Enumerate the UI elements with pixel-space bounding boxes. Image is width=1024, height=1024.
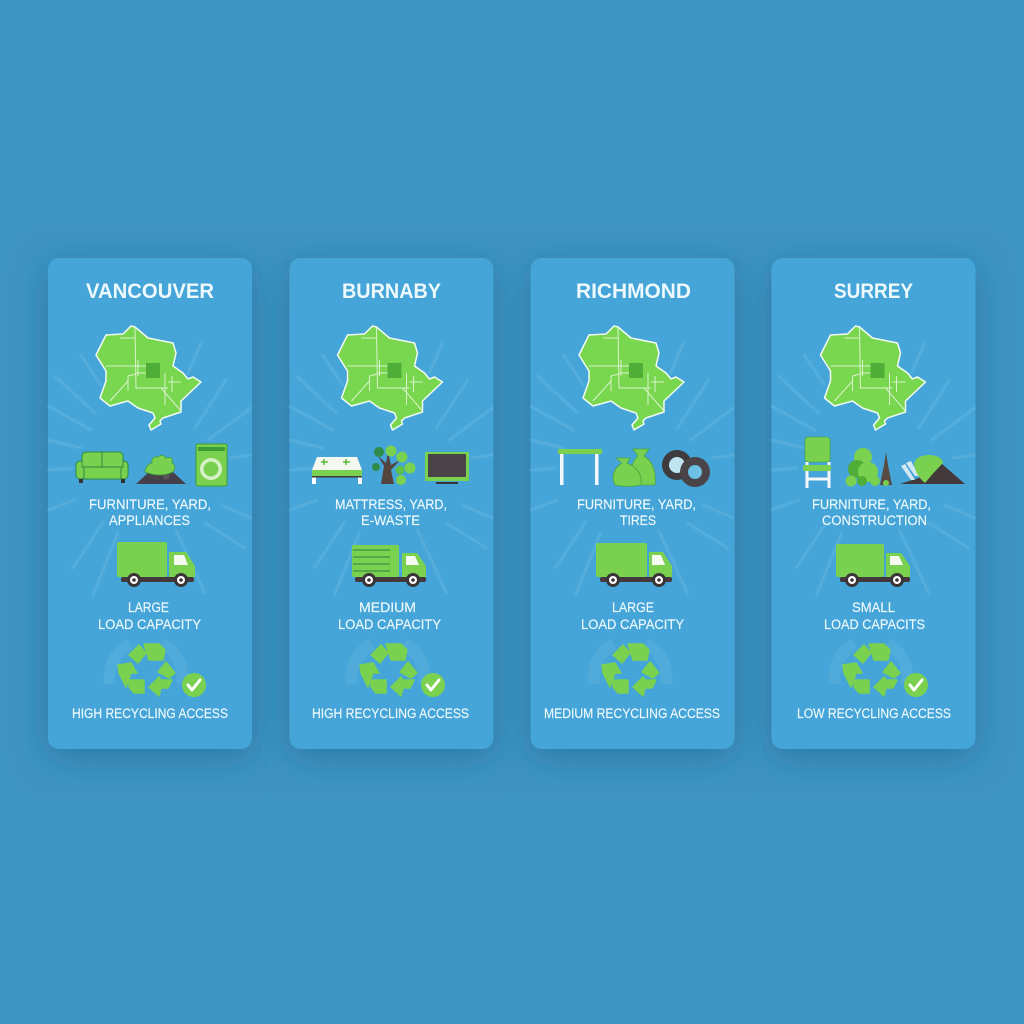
- icon: city map: [820, 326, 926, 430]
- panel: Surrey: [772, 258, 976, 749]
- card background: [48, 258, 252, 749]
- radiating rays: [772, 343, 974, 595]
- card background: [530, 258, 734, 749]
- heading: RICHMOND: [576, 280, 691, 303]
- icon: mattress: [312, 457, 362, 484]
- text: waste types: FURNITURE, YARD,: [89, 497, 211, 512]
- text: waste types: FURNITURE, YARD,: [577, 497, 696, 512]
- text: waste types: MATTRESS, YARD,: [335, 497, 447, 512]
- text: load capacity: MEDIUM: [359, 600, 416, 615]
- text: waste types: [335, 497, 447, 528]
- icon: washing machine: [196, 444, 227, 486]
- text: recycling access: HIGH RECYCLING ACCESS: [72, 706, 228, 721]
- panel: Burnaby: [290, 258, 494, 749]
- text: waste types: TIRES: [620, 513, 656, 528]
- icon: construction debris: [900, 455, 965, 484]
- text: waste types: CONSTRUCTION: [822, 513, 927, 528]
- icon: city map: [579, 326, 684, 430]
- text: recycling access: MEDIUM RECYCLING ACCESS: [544, 706, 720, 721]
- icon: recycling symbol: [834, 644, 908, 696]
- icon: truck: [836, 544, 910, 587]
- icon: truck: [596, 543, 672, 587]
- icon: city map: [338, 326, 442, 430]
- icon: chair: [803, 437, 831, 488]
- icon: tree: [372, 446, 416, 485]
- icon: television: [425, 452, 469, 484]
- radiating rays: [290, 343, 492, 595]
- panel: Vancouver: [48, 258, 252, 749]
- icon: yard waste mound: [136, 455, 186, 484]
- text: waste types: [89, 497, 211, 528]
- text: recycling access: LOW RECYCLING ACCESS: [797, 706, 951, 721]
- heading: VANCOUVER: [86, 280, 214, 303]
- text: load capacity: [338, 600, 441, 632]
- card background: [772, 258, 976, 749]
- icon: truck: [117, 542, 195, 587]
- text: recycling access: HIGH RECYCLING ACCESS: [312, 706, 469, 721]
- text: waste types: [812, 497, 931, 528]
- icon: garbage bags: [613, 449, 655, 486]
- text: load capacity: [581, 600, 684, 632]
- icon: city map: [96, 326, 201, 430]
- icon: table: [558, 449, 602, 485]
- icon: truck: [352, 545, 426, 587]
- text: waste types: E-WASTE: [361, 513, 420, 528]
- heading: BURNABY: [342, 280, 441, 303]
- text: load capacity: [824, 600, 925, 632]
- radiating rays: [48, 343, 251, 595]
- text: load capacity: LARGE: [612, 600, 654, 615]
- radiating rays: [530, 343, 734, 595]
- text: waste types: [577, 497, 696, 528]
- text: load capacity: LOAD CAPACITY: [98, 617, 201, 632]
- icon: check mark: [182, 673, 206, 697]
- heading: SURREY: [834, 280, 913, 303]
- text: waste types: FURNITURE, YARD,: [812, 497, 931, 512]
- icon: check mark: [421, 673, 445, 697]
- panel: Richmond: [530, 258, 734, 749]
- icon: recycling symbol: [593, 644, 667, 696]
- icon: recycling symbol: [109, 644, 183, 696]
- icon: check mark: [904, 673, 928, 697]
- icon: bush and branches: [846, 448, 892, 486]
- text: load capacity: SMALL: [852, 600, 895, 615]
- icon: tires: [662, 450, 710, 487]
- text: load capacity: LARGE: [128, 600, 169, 615]
- text: load capacity: LOAD CAPACITS: [824, 617, 925, 632]
- icon: recycling symbol: [351, 644, 425, 696]
- text: load capacity: LOAD CAPACITY: [581, 617, 684, 632]
- card background: [290, 258, 494, 749]
- text: load capacity: LOAD CAPACITY: [338, 617, 441, 632]
- text: waste types: APPLIANCES: [109, 513, 190, 528]
- text: load capacity: [98, 600, 201, 632]
- icon: sofa: [76, 452, 128, 483]
